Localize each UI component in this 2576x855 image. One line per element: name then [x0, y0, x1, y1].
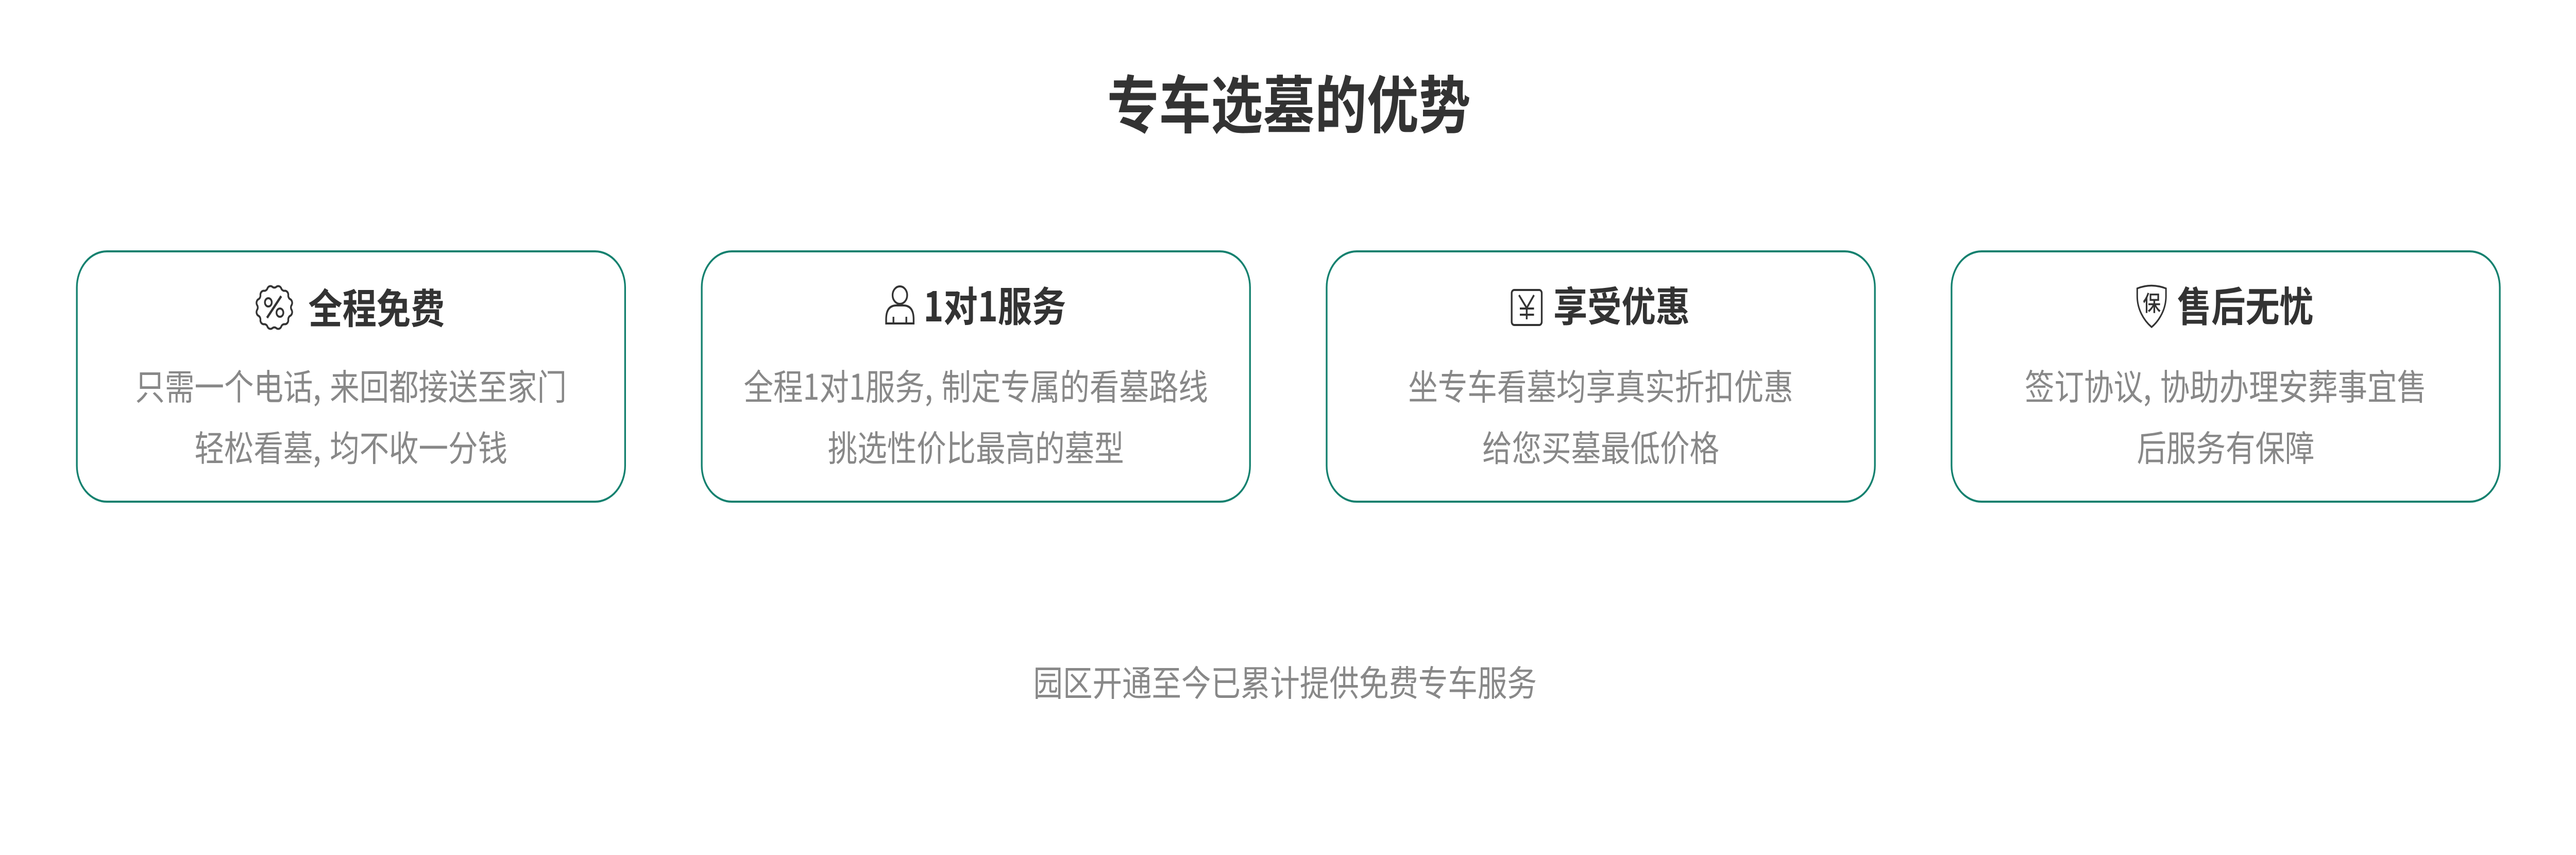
icon: yen: [1512, 290, 1541, 325]
description line 2: 给您买墓最低价格: [1482, 420, 1719, 472]
title: 专车选墓的优势: [1107, 56, 1471, 146]
heading: 售后无忧: [2177, 275, 2314, 334]
card outline: [1327, 251, 1875, 502]
heading: 全程免费: [308, 277, 445, 336]
description line 1: 只需一个电话,来回都接送至家门: [135, 359, 567, 411]
card outline: [702, 251, 1250, 502]
card outline: [77, 251, 625, 502]
heading: 1对1服务: [923, 275, 1066, 334]
description line 2: 挑选性价比最高的墓型: [828, 420, 1124, 472]
panel: 1对1服务: [702, 251, 1250, 502]
panel: 全程免费: [77, 251, 625, 502]
icon: percent badge: [257, 286, 292, 329]
icon: shield: [2137, 285, 2166, 327]
icon: person: [886, 286, 913, 323]
description line 1: 签订协议,协助办理安葬事宜售: [2025, 359, 2427, 411]
description line 2: 后服务有保障: [2137, 420, 2314, 472]
description line 1: 坐专车看墓均享真实折扣优惠: [1408, 359, 1793, 411]
heading: 享受优惠: [1553, 275, 1690, 334]
card outline: [1952, 251, 2500, 502]
description line 2: 轻松看墓,均不收一分钱: [194, 420, 507, 472]
panel: 享受优惠: [1327, 251, 1875, 502]
icon: shield: 保: [2143, 286, 2161, 318]
description line 1: 全程1对1服务,制定专属的看墓路线: [744, 359, 1208, 411]
footer text: 园区开通至今已累计提供免费专车服务: [1033, 655, 1537, 707]
panel: 售后无忧: [1952, 251, 2500, 502]
